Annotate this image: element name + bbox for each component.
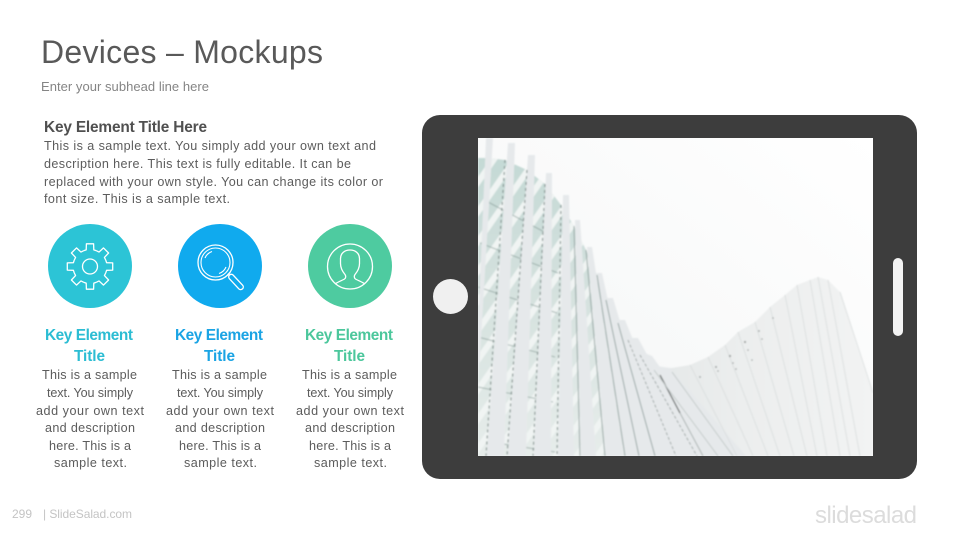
column 2 text: add your own text (166, 404, 274, 418)
footer page number and site: 299 (12, 507, 32, 521)
column 2 text: and description (175, 421, 265, 435)
tablet body (422, 115, 917, 479)
panel: column 2 search (166, 224, 274, 470)
column 2 text: here. This is a (179, 439, 261, 453)
intro paragraph: This is a sample text. You simply add your own text and (44, 139, 376, 153)
column 2 heading (175, 327, 263, 365)
panel: column 1 settings (36, 224, 144, 470)
column 3 heading: Key Element (305, 327, 393, 344)
column 1 heading: Key Element (45, 327, 133, 344)
column 3 text (296, 368, 404, 470)
intro heading: Key Element Title Here (44, 119, 207, 136)
tablet side button (893, 258, 903, 336)
intro paragraph: description here. This text is fully editable. It can be (44, 157, 351, 171)
column 2 text (166, 368, 274, 470)
column 2 text: This is a sample (172, 368, 267, 382)
panel: intro text (44, 119, 383, 206)
footer logo: slidesalad (815, 502, 917, 529)
icon: person in green circle (308, 224, 392, 308)
column 3 text: sample text. (314, 456, 387, 470)
column 1 text: text. You simply (47, 386, 134, 400)
column 1 text: and description (45, 421, 135, 435)
column 2 heading: Key Element (175, 327, 263, 344)
subhead: Enter your subhead line here (41, 79, 209, 94)
column 3 text: This is a sample (302, 368, 397, 382)
icon: magnifier in blue circle (178, 224, 262, 308)
photo: white ribbed building (478, 138, 873, 456)
footer page number and site: | SlideSalad.com (43, 507, 132, 521)
column 3 heading (305, 327, 393, 365)
column 3 text: add your own text (296, 404, 404, 418)
panel: column 3 profile (296, 224, 404, 470)
intro paragraph: font size. This is a sample text. (44, 192, 230, 206)
column 3 heading: Title (334, 348, 365, 365)
icon: gear in teal circle (48, 224, 132, 308)
column 1 text (36, 368, 144, 470)
column 1 text: here. This is a (49, 439, 131, 453)
column 1 text: add your own text (36, 404, 144, 418)
tablet home button (433, 279, 468, 314)
column 1 heading (45, 327, 133, 365)
intro paragraph (44, 139, 383, 206)
tablet mockup (422, 115, 917, 479)
column 1 text: This is a sample (42, 368, 137, 382)
column 3 text: here. This is a (309, 439, 391, 453)
column 3 text: text. You simply (307, 386, 394, 400)
column 3 text: and description (305, 421, 395, 435)
column 2 text: sample text. (184, 456, 257, 470)
column 2 heading: Title (204, 348, 235, 365)
column 2 text: text. You simply (177, 386, 264, 400)
column 1 text: sample text. (54, 456, 127, 470)
intro paragraph: replaced with your own style. You can change its color or (44, 175, 383, 189)
title: Devices – Mockups (41, 34, 323, 70)
column 1 heading: Title (74, 348, 105, 365)
